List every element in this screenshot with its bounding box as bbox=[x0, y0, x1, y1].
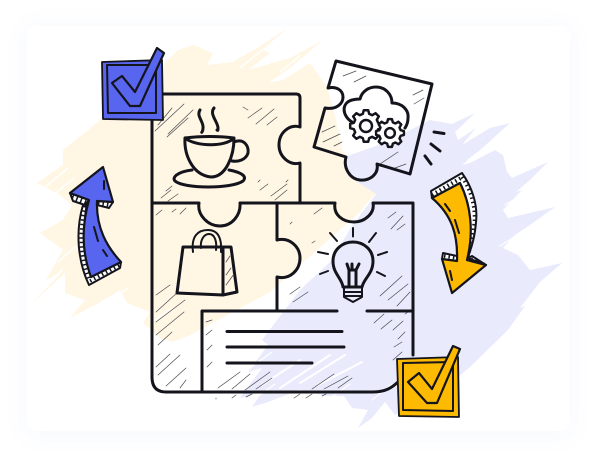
icon: coffee cup bbox=[174, 108, 248, 187]
document piece bbox=[166, 311, 413, 392]
background card bbox=[27, 26, 570, 431]
piece: bag and bulb divider bbox=[277, 203, 300, 311]
icon: small gear bbox=[376, 119, 404, 147]
arrow front face bbox=[70, 167, 121, 277]
lavender brush stroke bbox=[240, 113, 562, 428]
motion rays bbox=[425, 132, 444, 164]
icon: cloud bbox=[344, 87, 408, 128]
icon: light bulb bbox=[318, 228, 387, 302]
icon: blue check box bbox=[102, 48, 164, 120]
cream brush stroke bbox=[30, 28, 380, 342]
floating puzzle piece bbox=[314, 61, 444, 180]
arrow: yellow down bbox=[431, 173, 486, 293]
arrow: blue up bbox=[70, 167, 121, 285]
icon: yellow check box bbox=[397, 346, 460, 417]
arrow front face bbox=[432, 183, 486, 293]
hatching bbox=[155, 71, 424, 399]
document text lines bbox=[227, 332, 344, 363]
arrow side bands bbox=[431, 173, 486, 265]
piece: coffee bbox=[152, 94, 300, 392]
row divider with tabs bbox=[152, 203, 413, 355]
icon: large gear bbox=[350, 110, 382, 142]
puzzle board outline bbox=[152, 94, 413, 392]
icon: shopping bag bbox=[177, 230, 237, 295]
arrow side bands bbox=[70, 193, 121, 285]
